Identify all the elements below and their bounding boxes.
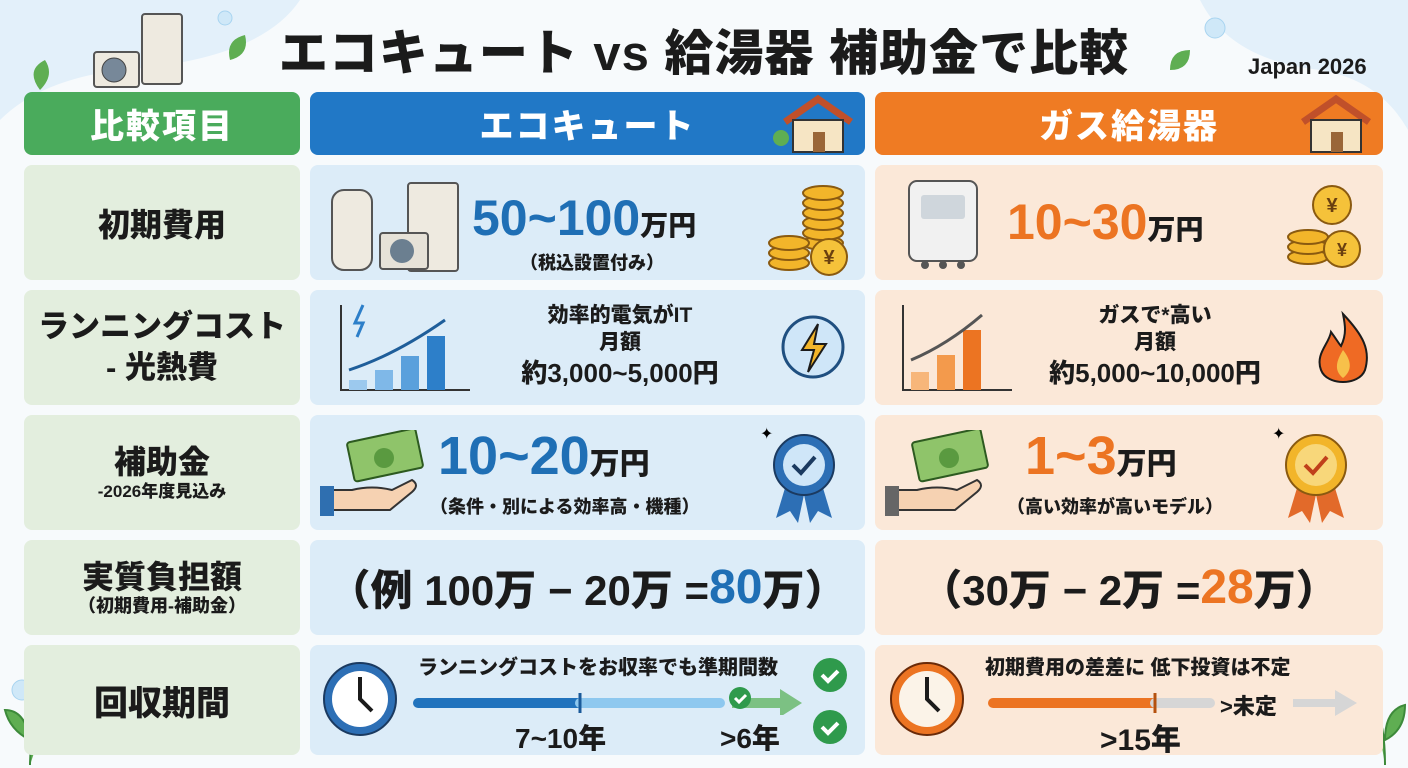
header: ガス給湯器 [875,92,1383,155]
icon: eco cute unit title [93,13,183,88]
row 3 eco [310,415,865,530]
row 4 label: 実質負担額 [82,558,242,594]
row 5 gas: 初期費用の差差に 低下投資は不定 [985,657,1291,679]
row 1 gas: ¥ [1326,195,1338,217]
row 1 eco: （税込設置付み） [520,253,664,273]
row 4 eco: 80 [709,561,762,614]
row 4 label [24,540,300,635]
row 2 eco: 効率的電気がIT [548,304,692,327]
row 5 eco: ランニングコストをお収率でも準期間数 [418,657,778,679]
row 4 eco [310,540,865,635]
row 3 gas: ✦ [1272,426,1285,443]
header: 比較項目: 比較項目 [90,108,234,146]
row 2 eco: 約3,000~5,000円 [521,358,719,388]
row 2 gas: ガスで*高い [1098,304,1212,327]
header: 比較項目 [24,92,300,155]
row 1 label [24,165,300,280]
header: ガス給湯器: ガス給湯器 [1039,108,1219,146]
row 5 gas [875,645,1383,755]
row 2 label: - 光熱費 [106,350,218,384]
row 5 eco: 7~10年 [515,723,606,754]
row 2 gas [875,290,1383,405]
row 5 gas: >15年 [1100,724,1181,757]
row 3 label [24,415,300,530]
row 3 gas: 1~3万円 [1025,426,1177,486]
row 4 label: （初期費用-補助金） [78,596,246,616]
row 1 gas [875,165,1383,280]
row 3 gas: （高い効率が高いモデル） [1007,497,1223,517]
row 4 eco: （例 100万 − 20万 = 万） [329,567,846,614]
row 1 label: 初期費用 [98,206,226,242]
row 3 eco: 10~20万円 [438,426,650,486]
row 1 gas: ¥ [1337,240,1347,260]
header: エコキュート [310,92,865,155]
row 1 eco: ¥ [823,247,835,269]
header: エコキュート: エコキュート [480,108,696,146]
row 5 label [24,645,300,755]
row 3 eco: ✦ [760,426,773,443]
row 2 eco: 月額 [599,331,641,354]
row 2 eco [310,290,865,405]
row 2 label: ランニングコスト [38,309,286,344]
row 2 gas: 月額 [1134,331,1176,354]
title: エコキュート vs 給湯器 補助金で比較 [279,27,1129,81]
row 2 gas: 約5,000~10,000円 [1049,358,1261,388]
row 2 label [24,290,300,405]
row 1 eco: 50~100万円 [472,190,696,246]
row 4 gas: （30万 − 2万 = 万） [920,567,1338,614]
row 4 gas: 28 [1200,561,1254,614]
row 5 gas: >未定 [1220,694,1277,719]
row 3 gas [875,415,1383,530]
row 3 label: 補助金 [114,444,210,480]
row 1 eco [310,165,865,280]
row 3 label: -2026年度見込み [98,482,226,500]
row 4 gas [875,540,1383,635]
subtitle: Japan 2026: Japan 2026 [1248,54,1367,79]
row 1 gas: 10~30万円 [1007,194,1203,250]
row 3 eco: （条件・別による効率高・機種） [430,497,699,517]
row 5 label: 回収期間 [94,684,230,722]
row 5 eco [310,645,865,755]
row 5 eco: >6年 [720,723,780,754]
